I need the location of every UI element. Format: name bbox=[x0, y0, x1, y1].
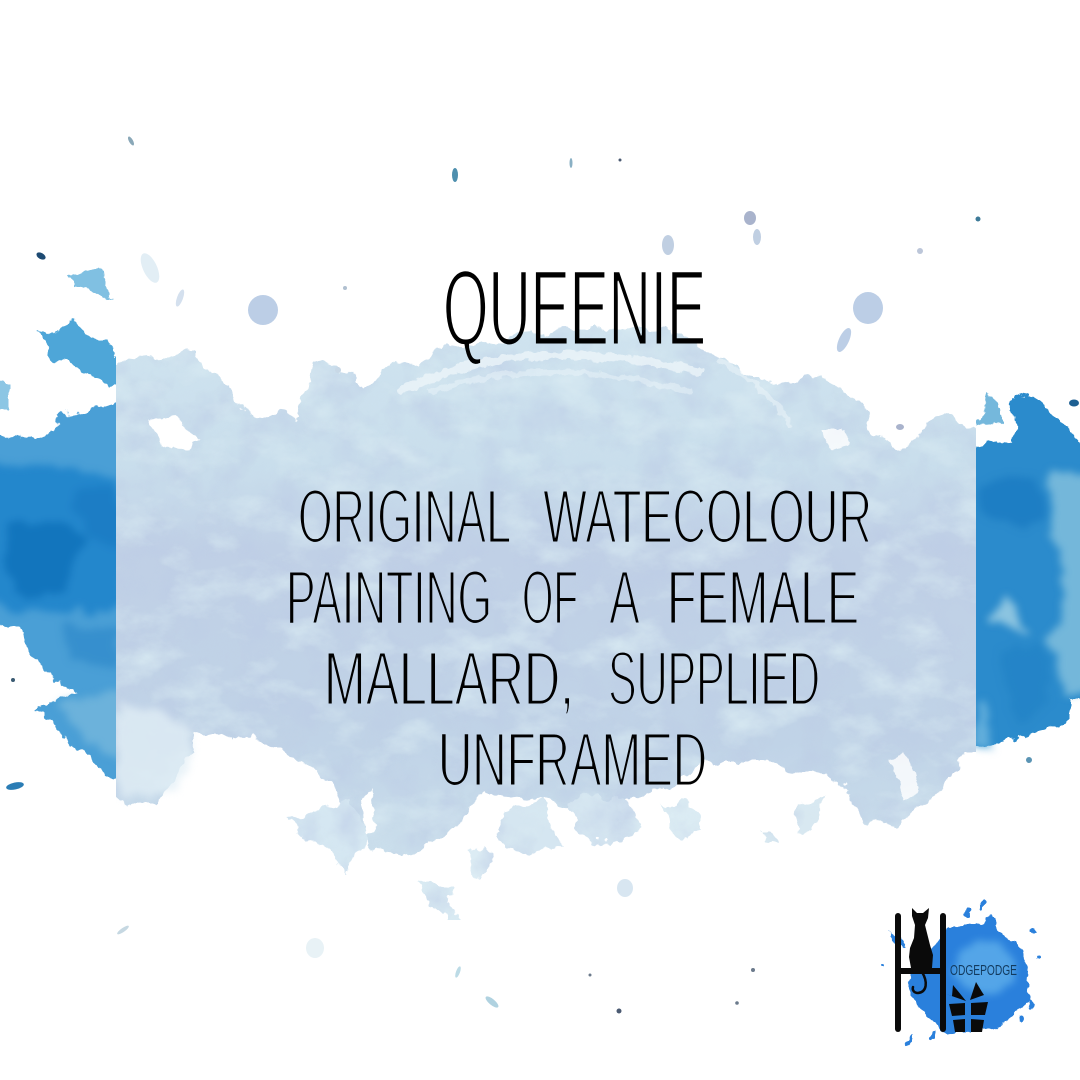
right wash tones bbox=[976, 470, 1080, 745]
brush arcs bbox=[400, 355, 790, 425]
title: QUEENIE bbox=[443, 247, 706, 368]
description text block: WATECOLOUR bbox=[543, 474, 872, 560]
background splash: strong blue right side bbox=[976, 392, 1080, 754]
white notches bbox=[150, 416, 920, 835]
icon: cat bbox=[909, 908, 933, 968]
description text block: UNFRAMED bbox=[438, 717, 707, 803]
description text block: FEMALE bbox=[667, 555, 859, 641]
description text block bbox=[286, 474, 872, 803]
logo: Hodgepodge bbox=[880, 898, 1038, 1048]
description text block: SUPPLIED bbox=[608, 636, 820, 722]
description text block: MALLARD, bbox=[324, 636, 574, 722]
description text block: PAINTING bbox=[286, 555, 492, 641]
description text block: OF bbox=[522, 555, 578, 641]
logo letter H bbox=[895, 913, 946, 1032]
icon: gift box bbox=[946, 982, 988, 1032]
background splash: pale washed panel area bbox=[105, 327, 990, 950]
description text block: A bbox=[609, 555, 640, 641]
left wash tones bbox=[0, 465, 125, 770]
logo blue splat bbox=[880, 898, 1038, 1048]
icon: cat tail bbox=[913, 972, 926, 993]
background splash: strong blue left side bbox=[0, 268, 116, 780]
pale lower-left fade bbox=[116, 700, 190, 802]
logo wordmark: ODGEPODGE bbox=[950, 962, 1017, 979]
description text block: ORIGINAL bbox=[298, 474, 511, 560]
